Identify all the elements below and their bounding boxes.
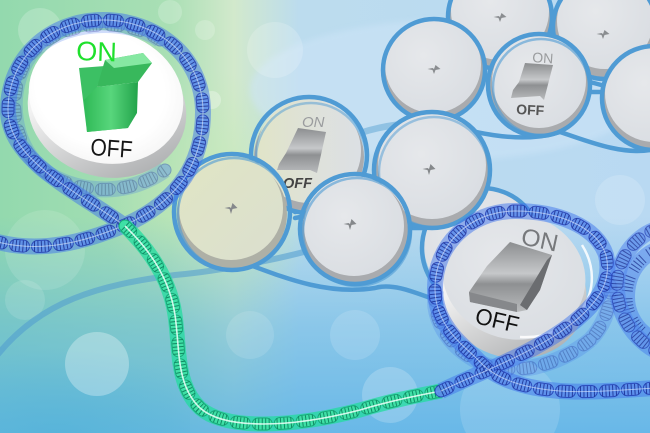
small switch disc: centre <box>251 97 367 213</box>
DNA: strand at right edge <box>617 225 650 360</box>
label: on: ON <box>76 36 117 67</box>
pale background arcs <box>0 122 440 358</box>
switch lever <box>511 63 553 100</box>
small disc: right edge <box>602 44 650 150</box>
small disc: lower right, behind big switch <box>422 187 542 308</box>
small disc: top row left <box>448 0 552 69</box>
grey lever <box>469 242 552 312</box>
small switch disc: upper right <box>488 34 590 136</box>
DNA: faded wrap around green switch <box>15 25 165 189</box>
small disc: tinted left <box>174 154 290 270</box>
small disc: top row right <box>553 0 650 79</box>
switch lever <box>277 128 326 173</box>
connector fibres between small switches <box>250 82 650 305</box>
large grey OFF switch disc <box>427 197 601 375</box>
label: off: OFF <box>90 134 133 164</box>
label: off: OFF <box>283 176 313 192</box>
DNA: blue strand wrapping green switch <box>0 20 203 246</box>
label: on: ON <box>519 223 561 258</box>
small disc: centre right <box>374 111 490 228</box>
green lever <box>79 53 152 132</box>
large green ON switch disc <box>12 13 202 195</box>
label: off: OFF <box>473 303 522 338</box>
DNA: blue strand wrapping grey switch <box>435 211 650 392</box>
label: on: ON <box>532 49 554 66</box>
small disc: middle far left <box>383 17 486 121</box>
DNA: faded wrap around grey switch <box>435 285 610 369</box>
label: on: ON <box>302 114 325 131</box>
label: off: OFF <box>516 101 545 118</box>
small disc: centre lower <box>300 174 411 286</box>
DNA: active green linker <box>125 226 441 424</box>
